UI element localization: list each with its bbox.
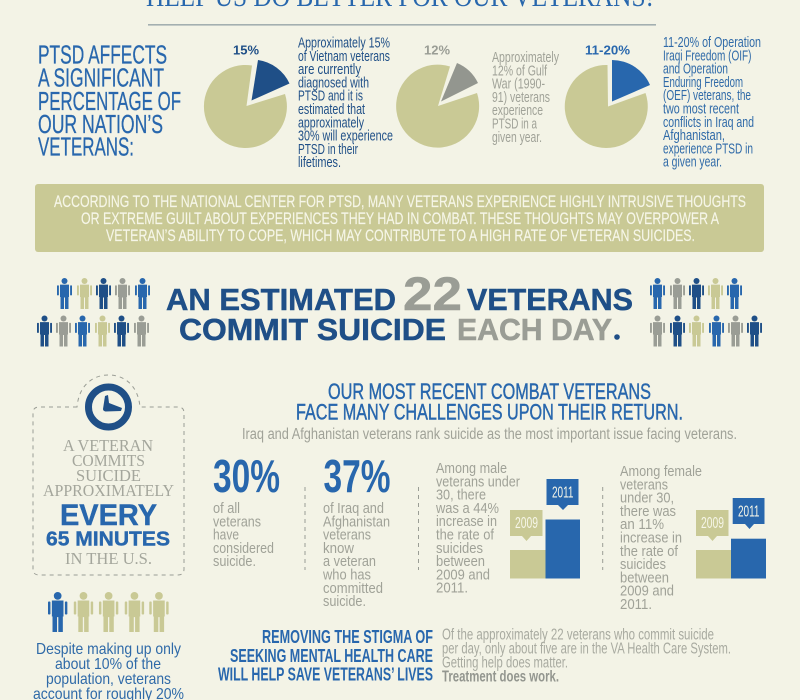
text: Gulf War veterans: experience bbox=[492, 103, 543, 119]
heading: combat veterans challenges: OUR MOST RECENT COMBAT VETERANS bbox=[328, 379, 651, 404]
panel: every 65 minutes bbox=[33, 375, 184, 575]
heading: PTSD affects: A SIGNIFICANT bbox=[38, 62, 164, 92]
text: male veterans: increase in bbox=[436, 513, 497, 530]
text: treatment does work: Of the approximately 22 veterans who commit suicide bbox=[442, 626, 714, 644]
headline: 22 veterans each day bbox=[166, 267, 633, 347]
panel: 12% Gulf War veterans bbox=[396, 42, 560, 148]
label: 12%: 12% bbox=[424, 42, 450, 58]
text: male veterans: the rate of bbox=[436, 526, 495, 544]
stat: 37%: veterans bbox=[323, 527, 371, 544]
stat: every 65 minutes: EVERY bbox=[60, 499, 157, 532]
callout: 2009: 2009 bbox=[515, 515, 538, 532]
text: female veterans: the rate of bbox=[620, 543, 679, 560]
pie chart: 11-20% bbox=[565, 60, 650, 148]
callout: 2009: 2009 bbox=[701, 515, 724, 532]
icon: clock bbox=[88, 387, 128, 427]
heading: removing the stigma: WILL HELP SAVE VETERANS’ LIVES bbox=[218, 664, 433, 684]
text: Vietnam veterans: of Vietnam veterans bbox=[298, 49, 390, 65]
heading: PTSD affects: VETERANS: bbox=[38, 132, 134, 162]
text: Gulf War veterans: Approximately bbox=[492, 50, 560, 66]
text: female veterans: under 30, bbox=[620, 490, 674, 507]
dashed callout outline bbox=[33, 375, 184, 575]
heading: PTSD affects: PTSD AFFECTS bbox=[38, 40, 167, 70]
stat: 30%: 30% bbox=[213, 450, 280, 502]
heading: removing the stigma: SEEKING MENTAL HEALTH CARE bbox=[230, 646, 433, 666]
heading: removing the stigma bbox=[218, 627, 433, 684]
stat: 37%: 37% bbox=[324, 450, 390, 502]
text: female veterans: suicides bbox=[620, 556, 666, 573]
stat: 37%: who has bbox=[322, 566, 371, 584]
stat: 37%: of Iraq and bbox=[323, 500, 384, 517]
text: female veterans bbox=[620, 463, 702, 613]
text: OIF and OEF veterans: (OEF) veterans, the bbox=[663, 88, 751, 104]
stat: every 65 minutes: 65 MINUTES bbox=[46, 528, 170, 550]
panel: 15% Vietnam veterans bbox=[204, 36, 393, 171]
text: treatment does work bbox=[442, 626, 731, 686]
text: veterans population share: about 10% of the bbox=[55, 656, 161, 673]
headline: 22 veterans each day: EACH DAY bbox=[457, 312, 612, 347]
callout: 2011: 2011 bbox=[738, 504, 760, 520]
callout: 2011: 2011 bbox=[552, 484, 574, 502]
text: a veteran commits suicide: IN THE U.S. bbox=[65, 549, 152, 568]
text: Vietnam veterans: are currently bbox=[298, 62, 362, 78]
pie chart: 12% bbox=[396, 63, 479, 148]
text: Gulf War veterans bbox=[492, 50, 560, 146]
text: a veteran commits suicide: COMMITS bbox=[72, 451, 145, 470]
headline: 22 veterans each day: COMMIT SUICIDE bbox=[179, 312, 446, 347]
text: Vietnam veterans: approximately bbox=[298, 115, 365, 131]
headline: 22 veterans each day: AN ESTIMATED bbox=[166, 282, 396, 317]
text: female veterans: increase in bbox=[620, 530, 682, 546]
text: male veterans: between bbox=[436, 553, 485, 570]
text: OIF and OEF veterans: a given year. bbox=[663, 155, 722, 171]
text: OIF and OEF veterans: Enduring Freedom bbox=[663, 75, 743, 91]
text: male veterans: was a 44% bbox=[435, 500, 499, 517]
stat: 30%: of all bbox=[213, 500, 240, 517]
text: OIF and OEF veterans: conflicts in Iraq and bbox=[663, 115, 754, 131]
text: Vietnam veterans: PTSD and it is bbox=[298, 89, 363, 105]
text: Gulf War veterans: 91) veterans bbox=[492, 90, 550, 106]
stat: 30%: have bbox=[213, 527, 239, 544]
text: male veterans: 2011. bbox=[436, 580, 468, 597]
text: Gulf War veterans: PTSD in a bbox=[492, 116, 538, 132]
panel: 11-20% OIF and OEF veterans bbox=[565, 35, 761, 171]
text: treatment does work: Treatment does work. bbox=[442, 668, 559, 686]
text: veterans population share: Despite making up only bbox=[36, 641, 181, 658]
stat: 30% bbox=[213, 450, 280, 570]
text: OIF and OEF veterans: experience PTSD in bbox=[663, 141, 753, 157]
text: Vietnam veterans: 30% will experience bbox=[298, 129, 393, 145]
text: OIF and OEF veterans: and Operation bbox=[663, 62, 728, 78]
text: male veterans bbox=[435, 460, 520, 597]
text: male veterans: 2009 and bbox=[436, 566, 490, 583]
heading: removing the stigma: REMOVING THE STIGMA OF bbox=[262, 627, 433, 647]
text: Gulf War veterans: given year. bbox=[492, 130, 542, 146]
label: 15%: 15% bbox=[233, 42, 259, 58]
headline: 22 veterans each day: 22 bbox=[403, 267, 462, 320]
text: Vietnam veterans: diagnosed with bbox=[298, 75, 369, 91]
heading: PTSD affects: PERCENTAGE OF bbox=[38, 86, 181, 116]
label: 11-20%: 11-20% bbox=[585, 42, 630, 58]
heading: combat veterans challenges bbox=[296, 379, 683, 424]
text: female veterans: 2011. bbox=[620, 596, 652, 613]
text: female veterans: between bbox=[620, 569, 669, 586]
text: veterans population share bbox=[33, 641, 184, 700]
text: Vietnam veterans: lifetimes. bbox=[298, 155, 341, 171]
text: female veterans: 2009 and bbox=[620, 583, 674, 600]
icons: people group left bbox=[37, 278, 150, 346]
text: OIF and OEF veterans: 11-20% of Operation bbox=[663, 35, 761, 51]
text: male veterans: 30, there bbox=[436, 487, 486, 504]
stat: 30%: considered bbox=[213, 540, 274, 557]
text: Vietnam veterans: estimated that bbox=[298, 102, 365, 118]
text: female veterans: veterans bbox=[620, 476, 668, 493]
bar chart: female veterans bbox=[696, 498, 766, 578]
text: Vietnam veterans: PTSD in their bbox=[298, 142, 358, 158]
text: OIF and OEF veterans bbox=[663, 35, 761, 171]
text: a veteran commits suicide: APPROXIMATELY bbox=[43, 481, 174, 500]
stat: 37%: know bbox=[323, 540, 354, 557]
text: female veterans: there was bbox=[620, 503, 676, 520]
text: Gulf War veterans: 12% of Gulf bbox=[492, 63, 548, 79]
text: OIF and OEF veterans: Iraqi Freedom (OIF) bbox=[663, 48, 752, 64]
text: female veterans: Among female bbox=[620, 463, 702, 480]
text: OIF and OEF veterans: two most recent bbox=[663, 102, 739, 118]
stat: 37%: suicide. bbox=[323, 593, 366, 610]
icons: one in five people bbox=[48, 592, 169, 632]
stat: 30%: veterans bbox=[213, 513, 261, 530]
stat: every 65 minutes bbox=[46, 499, 170, 550]
text: Gulf War veterans: War (1990- bbox=[492, 77, 545, 93]
text: a veteran commits suicide bbox=[43, 436, 174, 568]
text: female veterans: an 11% bbox=[620, 516, 664, 533]
text: a veteran commits suicide: A VETERAN bbox=[63, 436, 153, 455]
text: veterans population share: population, veterans bbox=[46, 671, 171, 688]
text: Vietnam veterans: Approximately 15% bbox=[298, 36, 390, 52]
heading: PTSD affects bbox=[38, 40, 181, 162]
icons: people group right bbox=[650, 278, 762, 346]
text: OIF and OEF veterans: Afghanistan, bbox=[663, 128, 725, 144]
text: a veteran commits suicide: SUICIDE bbox=[76, 466, 141, 485]
stat: 37%: committed bbox=[323, 580, 383, 597]
text: male veterans: suicides bbox=[436, 540, 483, 557]
heading: PTSD affects: OUR NATION’S bbox=[38, 109, 163, 139]
text: treatment does work: Getting help does matter. bbox=[442, 654, 568, 672]
stat: 30%: suicide. bbox=[213, 553, 256, 570]
banner: National Center for PTSD bbox=[35, 184, 764, 252]
pie chart: 15% bbox=[204, 60, 290, 148]
stat: 37%: a veteran bbox=[323, 553, 376, 570]
headline: 22 veterans each day: VETERANS bbox=[467, 282, 633, 317]
stat: 37%: Afghanistan bbox=[323, 513, 390, 530]
bar chart: male veterans bbox=[510, 479, 580, 578]
text: male veterans: veterans under bbox=[436, 473, 520, 490]
text: Vietnam veterans bbox=[298, 36, 393, 171]
text: male veterans: Among male bbox=[436, 460, 507, 477]
stat: 37% bbox=[322, 450, 390, 610]
